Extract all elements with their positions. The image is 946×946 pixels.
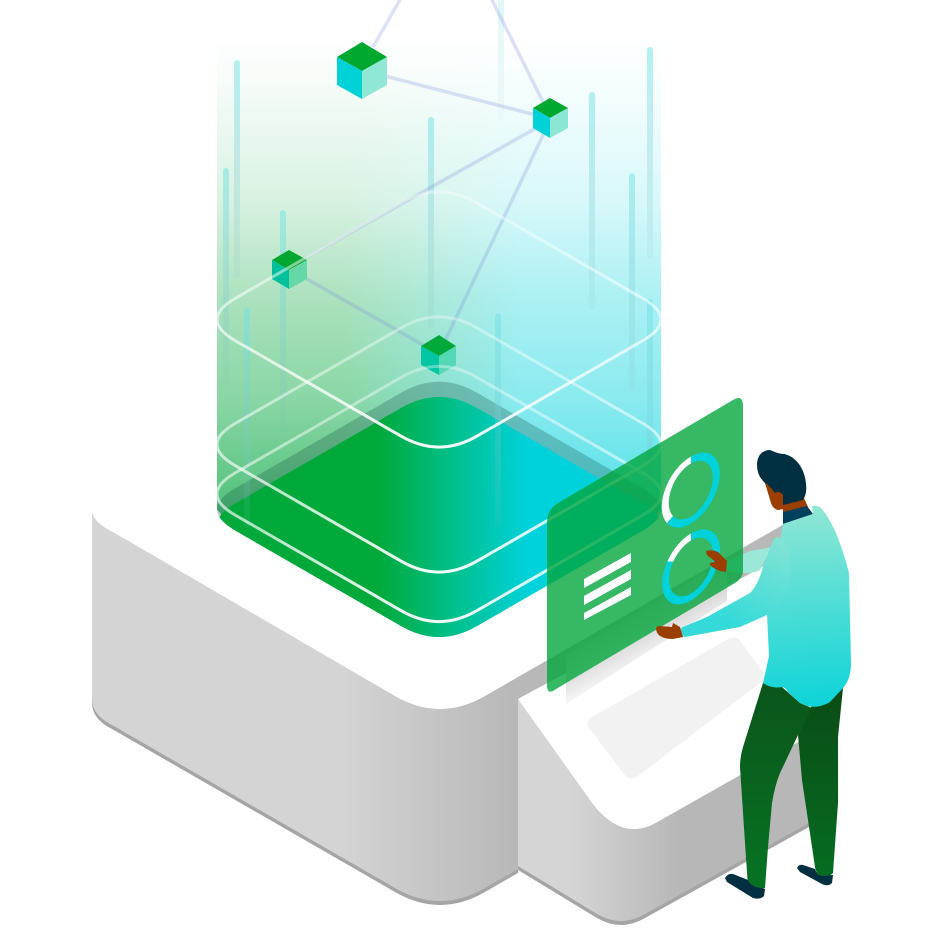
back shoe: [797, 865, 833, 885]
glass data tank: [217, 0, 661, 652]
near hand: [656, 623, 683, 639]
base grey side: [92, 500, 790, 901]
cube 2: [533, 98, 568, 138]
cube 4: [421, 335, 456, 375]
base bottom edge shadow: [92, 690, 518, 905]
man far arm: [726, 547, 772, 573]
terminal white top: [518, 552, 809, 829]
man figure: [656, 450, 851, 899]
front leg: [740, 683, 812, 890]
hair: [757, 450, 806, 505]
front shoe: [725, 874, 765, 899]
collar: [783, 506, 813, 524]
main base platform: [92, 490, 800, 905]
isometric white rings: [217, 192, 661, 622]
panel surface: [547, 398, 743, 692]
donut chart bottom: [666, 522, 717, 612]
neck: [783, 496, 808, 514]
far hand: [706, 550, 727, 572]
cube 1: [337, 42, 387, 99]
cube 3: [272, 250, 307, 289]
face: [765, 480, 790, 510]
tank floor dark rim: [217, 382, 661, 637]
terminal input pad: [588, 638, 764, 779]
near arm sleeve: [681, 537, 790, 637]
holographic dashboard panel: [547, 398, 743, 692]
panel cast shadow: [566, 560, 727, 704]
back leg: [798, 688, 843, 877]
tank solid floor: [217, 397, 661, 652]
base white top: [92, 490, 800, 709]
terminal grey side: [518, 699, 809, 921]
illustration: [92, 0, 851, 925]
torso shirt: [763, 506, 851, 707]
vertical light bars: [223, 0, 653, 528]
donut chart top: [665, 445, 716, 535]
network connection lines: [300, 0, 545, 346]
tank gradient walls: [217, 36, 661, 637]
text lines icon: [584, 553, 631, 620]
terminal bottom edge shadow: [518, 815, 809, 925]
control terminal: [518, 552, 809, 925]
